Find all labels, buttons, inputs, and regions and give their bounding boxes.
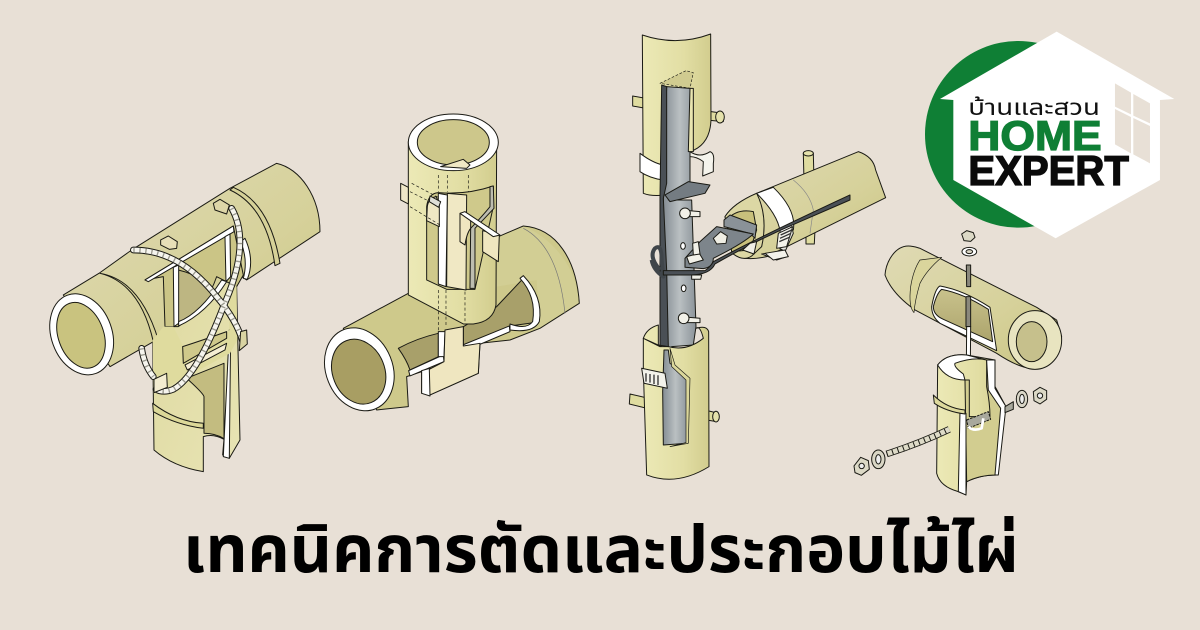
right branch bbox=[725, 152, 886, 259]
logo: Thai wordmark: บ้านและสวน bbox=[968, 95, 1100, 120]
bracket flanges bbox=[665, 182, 710, 202]
hose clamp bbox=[777, 227, 793, 248]
lower open end bbox=[312, 317, 406, 421]
vertical lower tube bbox=[937, 355, 1005, 495]
steel plate bbox=[663, 87, 696, 445]
lower post bbox=[643, 325, 709, 479]
bolts bbox=[687, 253, 703, 264]
logo: white house bbox=[940, 32, 1174, 238]
rod and fasteners bbox=[966, 265, 971, 327]
illustration: bamboo joint with threaded rod bbox=[854, 231, 1062, 495]
illustration: bamboo tee joint with tenon bbox=[312, 114, 579, 421]
bamboo ring end bbox=[1008, 311, 1062, 369]
horizontal tube bbox=[885, 246, 1062, 368]
open bamboo end bbox=[39, 285, 124, 384]
illustration: bamboo joint with steel plate and hose clamps bbox=[629, 34, 886, 479]
top opening bbox=[408, 114, 498, 171]
rope lashing bbox=[133, 208, 243, 391]
logo: HOME: HOME bbox=[968, 112, 1102, 159]
title: เทคนิคการตัดและประกอบไม้ไผ่ bbox=[183, 512, 1019, 586]
logo bbox=[925, 32, 1174, 238]
upright tube bbox=[408, 142, 497, 324]
illustration: bamboo tee joint tied with rope bbox=[39, 163, 320, 472]
pegs bbox=[629, 96, 815, 422]
threaded bolt bbox=[887, 429, 949, 454]
logo: window bbox=[1115, 83, 1150, 163]
logo: green circle bbox=[925, 41, 1112, 228]
upper post bbox=[642, 34, 711, 196]
logo: EXPERT: EXPERT bbox=[968, 147, 1129, 194]
